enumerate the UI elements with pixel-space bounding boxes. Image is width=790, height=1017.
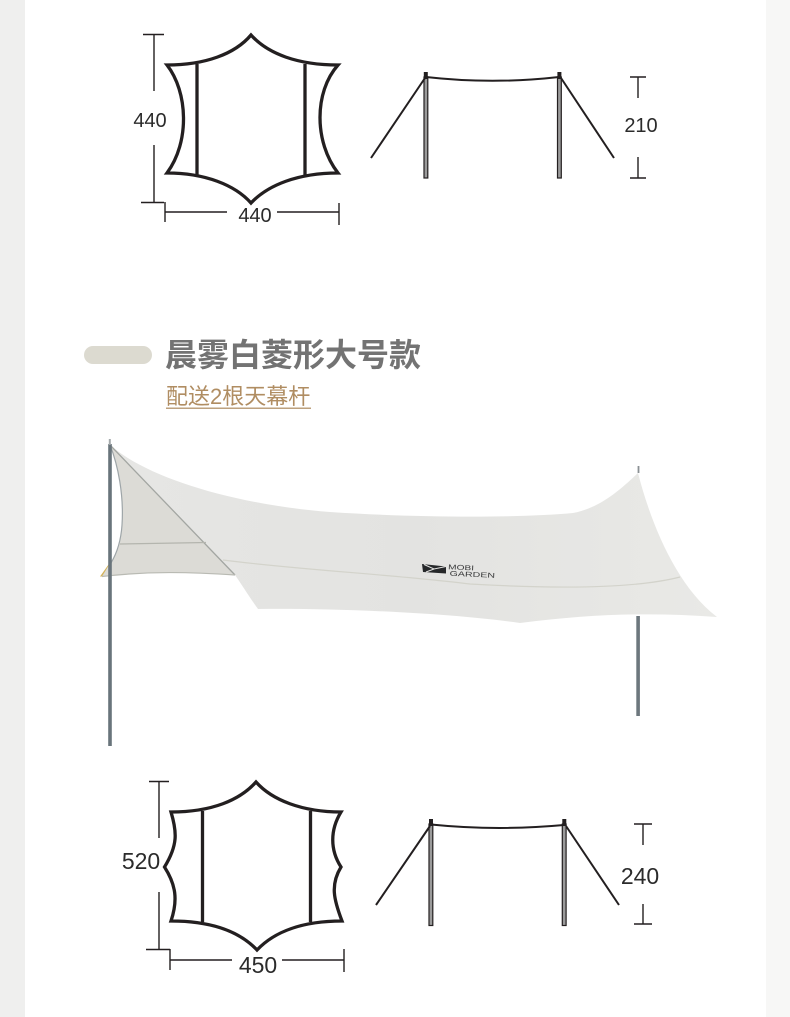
tarp underside flap bbox=[102, 445, 235, 576]
height label 440: 440 bbox=[133, 110, 167, 132]
flap edges bbox=[110, 445, 122, 563]
subheading underline bbox=[166, 408, 311, 409]
roof seam bbox=[223, 560, 680, 587]
width label 450: 450 bbox=[239, 952, 277, 978]
right pole large bbox=[562, 824, 566, 926]
right pole bbox=[636, 616, 640, 716]
illustration: tarp with poles bbox=[100, 439, 717, 746]
width label 440: 440 bbox=[238, 205, 272, 227]
cable and guy lines large bbox=[376, 824, 619, 905]
heading: 晨雾白菱形大号款 bbox=[165, 337, 421, 373]
right background band bbox=[766, 0, 790, 1017]
tarp poles line large bbox=[202, 811, 310, 922]
flap lower edge bbox=[102, 573, 235, 576]
logo text lower: GARDEN bbox=[449, 571, 495, 580]
right pole small bbox=[558, 77, 561, 178]
pole caps small bbox=[426, 72, 559, 79]
logo text: MOBI bbox=[448, 564, 474, 572]
height label 240: 240 bbox=[621, 863, 659, 889]
left pole large bbox=[429, 824, 433, 926]
yellow corner bbox=[100, 561, 111, 576]
cable and guy lines small bbox=[371, 77, 614, 158]
height marks 210 bbox=[630, 77, 646, 178]
left background band bbox=[0, 0, 25, 1017]
subheading: 配送2根天幕杆 bbox=[166, 384, 310, 409]
left pole bbox=[108, 444, 112, 746]
height label 520: 520 bbox=[122, 848, 160, 874]
left pole small bbox=[424, 77, 428, 178]
diagram: large tarp top view with dimensions bbox=[122, 781, 344, 978]
heading pill bbox=[84, 346, 152, 364]
tarp outline small bbox=[167, 35, 338, 203]
width dimension lines 440 bbox=[165, 202, 339, 225]
height dimension lines 440 bbox=[141, 34, 164, 202]
left pole tip bbox=[109, 439, 111, 445]
diagram: small tarp top view with dimensions bbox=[133, 34, 339, 227]
width dimension lines 450 bbox=[170, 949, 344, 972]
diagram: small tarp side view with height bbox=[371, 72, 658, 178]
right pole tip bbox=[638, 466, 639, 473]
pole caps large bbox=[431, 819, 564, 826]
fold line bbox=[110, 445, 235, 575]
logo mark bbox=[422, 564, 446, 574]
height label 210: 210 bbox=[624, 115, 658, 137]
diagram: large tarp side view with height bbox=[376, 819, 659, 926]
tarp poles line small bbox=[197, 64, 305, 175]
height dimension lines 520 bbox=[146, 781, 170, 950]
height marks 240 bbox=[634, 824, 652, 924]
flap seam bbox=[120, 542, 206, 544]
tarp outline large bbox=[164, 782, 342, 950]
main tarp roof bbox=[110, 445, 717, 623]
